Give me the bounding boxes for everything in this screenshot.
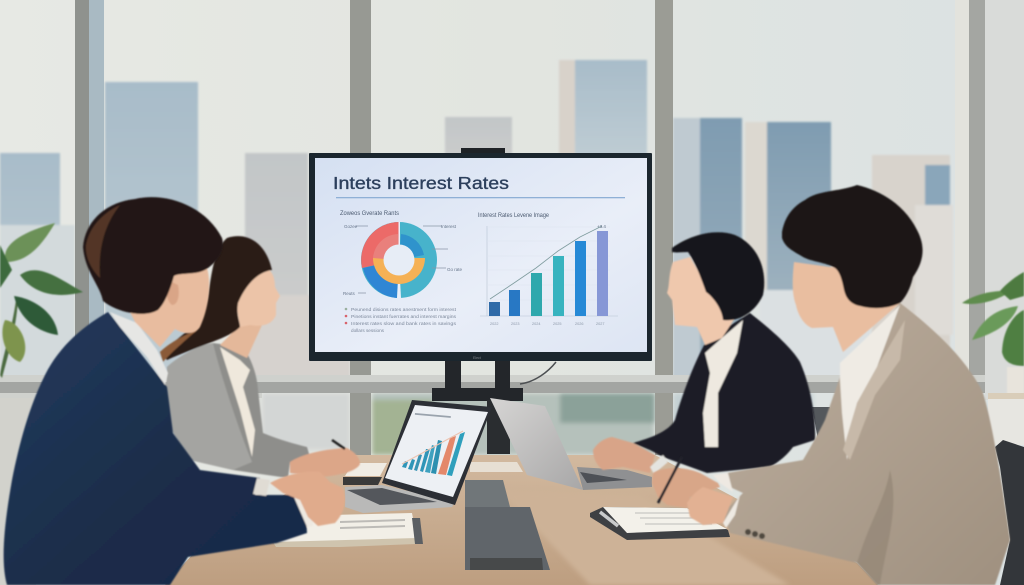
black blazer — [633, 313, 815, 473]
person: woman in grey blazer — [160, 236, 360, 478]
document on table — [273, 513, 423, 547]
plant: right with pot — [962, 272, 1024, 396]
laptop: center open with chart — [345, 400, 492, 513]
city skyline — [0, 60, 953, 385]
hair auburn tips — [160, 330, 197, 362]
bar chart on display: 2024 — [532, 322, 540, 326]
laptop screen — [385, 405, 488, 497]
curly hair — [83, 197, 223, 314]
donut chart: Interest — [441, 224, 457, 229]
donut chart — [340, 211, 463, 298]
navy suit — [4, 312, 307, 585]
white shirt — [840, 305, 900, 460]
white shirt collar — [110, 312, 168, 385]
neck and face — [793, 262, 900, 352]
pen — [658, 457, 682, 503]
plant: left — [0, 223, 83, 378]
notebook under woman's hand — [343, 463, 387, 485]
wall display: Elect — [473, 356, 481, 360]
curly hair — [782, 185, 923, 308]
short hair — [672, 232, 764, 320]
shirt cuffs — [713, 473, 733, 492]
white blouse — [220, 347, 255, 457]
center table reflection panel — [465, 480, 550, 570]
hand with pen — [652, 468, 720, 508]
bar chart on display: 2022 — [490, 322, 498, 326]
person: man in navy suit — [4, 197, 345, 585]
neck and face — [130, 268, 209, 347]
pen — [332, 440, 345, 449]
face — [236, 266, 280, 327]
notes list on display — [345, 307, 457, 333]
writing hand — [290, 448, 360, 477]
bar chart on display: 2023 — [511, 322, 519, 326]
display title: Intets Interest Rates — [333, 173, 509, 193]
cuffs — [293, 495, 313, 527]
bar chart on display: Interest Rates Levene Image — [478, 213, 550, 219]
laptop: silver facing away — [490, 398, 652, 490]
jacket lapel — [843, 320, 905, 460]
donut chart: Go rate — [447, 267, 463, 272]
back paper on table — [470, 462, 523, 472]
boardroom table — [165, 455, 878, 585]
laptop base — [345, 485, 455, 513]
clipboard on table — [590, 507, 730, 540]
ear — [167, 282, 179, 305]
neck and face — [667, 257, 735, 345]
sleeve buttons — [745, 529, 765, 539]
notes list on display: Pinetions instant fuerrates and interest margins — [351, 314, 457, 319]
display screen — [315, 158, 647, 352]
notes list on display: Interest rates slow and bank rates in savings — [351, 321, 457, 326]
donut chart: Reuts — [343, 291, 356, 296]
notes list on display: dollars sessions — [351, 328, 385, 333]
bar chart on display: 2027 — [596, 322, 604, 326]
chairs on the right — [812, 407, 1024, 585]
monitor stand — [432, 360, 556, 454]
long hair — [160, 236, 272, 360]
beige blazer — [723, 303, 1010, 585]
display camera — [461, 148, 505, 156]
side cabinet — [988, 393, 1024, 445]
wall display — [309, 148, 652, 361]
grey blazer — [165, 343, 310, 478]
hands — [270, 472, 345, 526]
display bezel — [309, 153, 652, 361]
notes list on display: Peunend disions rates anestment form interest — [351, 307, 457, 312]
hair highlight — [86, 205, 120, 278]
laptop chart — [402, 413, 465, 476]
bar chart on display: 2025 — [553, 322, 561, 326]
clasped hands — [593, 437, 655, 473]
donut chart: Gozee — [344, 224, 358, 229]
lower window greenery — [262, 393, 813, 455]
shirt cuff — [650, 455, 668, 474]
donut chart: Zoweos Gverate Rants — [340, 211, 399, 217]
bar chart on display: +3.4 — [597, 224, 606, 229]
neck — [220, 325, 262, 358]
bar chart on display: 2026 — [575, 322, 583, 326]
sleeve shading — [857, 470, 893, 585]
front hand — [687, 487, 733, 525]
bar chart on display — [478, 213, 618, 326]
white shirt — [703, 320, 743, 447]
person: man in beige blazer — [652, 185, 1010, 585]
laptop lid — [382, 400, 492, 505]
person: woman in black blazer — [593, 232, 815, 474]
